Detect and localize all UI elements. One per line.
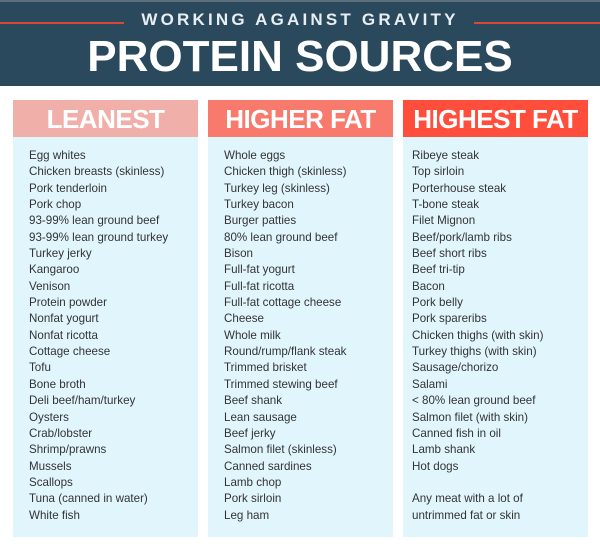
list: leanest: Mussels	[29, 460, 72, 473]
list: higher fat: Lamb chop	[224, 476, 281, 489]
list: higher fat	[224, 149, 346, 522]
list: highest fat: Chicken thighs (with skin)	[412, 329, 543, 342]
list: highest fat: Beef short ribs	[412, 247, 487, 260]
list: leanest: Egg whites	[29, 149, 86, 162]
list: highest fat: Beef/pork/lamb ribs	[412, 231, 512, 244]
list: higher fat: Burger patties	[224, 214, 296, 227]
list: higher fat: Turkey leg (skinless)	[224, 182, 330, 195]
list: leanest: Tofu	[29, 361, 51, 374]
list: leanest: Chicken breasts (skinless)	[29, 165, 164, 178]
list: highest fat: Bacon	[412, 280, 445, 293]
panel: highest fat	[403, 100, 588, 537]
list: highest fat: Top sirloin	[412, 165, 464, 178]
list: highest fat: Canned fish in oil	[412, 427, 501, 440]
list: leanest: Crab/lobster	[29, 427, 92, 440]
list: leanest: Pork chop	[29, 198, 81, 211]
list: leanest: Turkey jerky	[29, 247, 92, 260]
list: highest fat: Hot dogs	[412, 460, 458, 473]
list: leanest: 93-99% lean ground beef	[29, 214, 159, 227]
list: highest fat: < 80% lean ground beef	[412, 394, 535, 407]
list: higher fat: Trimmed stewing beef	[224, 378, 338, 391]
list: higher fat: 80% lean ground beef	[224, 231, 337, 244]
list: leanest: Scallops	[29, 476, 73, 489]
list: highest fat: Pork belly	[412, 296, 463, 309]
heading: higher fat	[208, 100, 393, 137]
list: leanest: 93-99% lean ground turkey	[29, 231, 168, 244]
list: higher fat: Whole eggs	[224, 149, 285, 162]
list: leanest: Cottage cheese	[29, 345, 110, 358]
list: higher fat: Salmon filet (skinless)	[224, 443, 337, 456]
list: higher fat: Cheese	[224, 312, 264, 325]
list: leanest: Deli beef/ham/turkey	[29, 394, 135, 407]
list: highest fat: Sausage/chorizo	[412, 361, 498, 374]
list: higher fat: Lean sausage	[224, 410, 297, 424]
list: highest fat: untrimmed fat or skin	[412, 509, 520, 522]
list: higher fat: Pork sirloin	[224, 492, 281, 505]
subtitle: WORKING AGAINST GRAVITY	[141, 10, 459, 29]
title: PROTEIN SOURCES	[87, 32, 513, 81]
list: higher fat: Chicken thigh (skinless)	[224, 165, 346, 178]
list: higher fat: Leg ham	[224, 509, 269, 522]
heading: leanest	[13, 100, 198, 137]
list: highest fat: Any meat with a lot of	[412, 492, 523, 505]
panel: higher fat	[208, 100, 393, 537]
list: leanest: Pork tenderloin	[29, 182, 107, 195]
list: leanest	[29, 149, 168, 522]
list: leanest: Nonfat yogurt	[29, 312, 99, 325]
list: higher fat: Round/rump/flank steak	[224, 345, 346, 358]
header banner	[0, 0, 600, 86]
list: higher fat: Turkey bacon	[224, 198, 294, 211]
heading: leanest: LEANEST	[47, 104, 164, 134]
list: higher fat: Beef shank	[224, 394, 282, 407]
list: leanest: Protein powder	[29, 296, 107, 309]
list: leanest: Nonfat ricotta	[29, 329, 98, 342]
list: highest fat: Salmon filet (with skin)	[412, 410, 528, 424]
list: leanest: Shrimp/prawns	[29, 443, 106, 456]
list: highest fat: Beef tri-tip	[412, 263, 465, 276]
list: highest fat: Turkey thighs (with skin)	[412, 345, 537, 358]
list: highest fat: Ribeye steak	[412, 149, 479, 162]
heading: higher fat: HIGHER FAT	[225, 104, 376, 134]
list: leanest: Kangaroo	[29, 263, 79, 276]
list: higher fat: Beef jerky	[224, 427, 276, 440]
list: highest fat: T-bone steak	[412, 198, 479, 211]
list: leanest: Tuna (canned in water)	[29, 492, 148, 505]
list: highest fat: Salami	[412, 378, 447, 391]
list: higher fat: Trimmed brisket	[224, 361, 307, 374]
heading: highest fat: HIGHEST FAT	[413, 104, 578, 134]
list: highest fat: Pork spareribs	[412, 312, 487, 325]
list: leanest: White fish	[29, 509, 80, 522]
list: higher fat: Whole milk	[224, 329, 281, 342]
list: leanest: Oysters	[29, 410, 69, 424]
list: highest fat: Porterhouse steak	[412, 182, 506, 195]
list: higher fat: Full-fat cottage cheese	[224, 296, 341, 309]
list: leanest: Bone broth	[29, 378, 86, 391]
list: highest fat	[412, 149, 543, 522]
list: higher fat: Full-fat ricotta	[224, 280, 294, 293]
list: highest fat: Filet Mignon	[412, 214, 475, 227]
list: leanest: Venison	[29, 280, 70, 293]
list: higher fat: Bison	[224, 247, 253, 260]
list: higher fat: Canned sardines	[224, 460, 312, 473]
panel: leanest	[13, 100, 198, 537]
list: highest fat: Lamb shank	[412, 443, 475, 456]
list: higher fat: Full-fat yogurt	[224, 263, 295, 276]
